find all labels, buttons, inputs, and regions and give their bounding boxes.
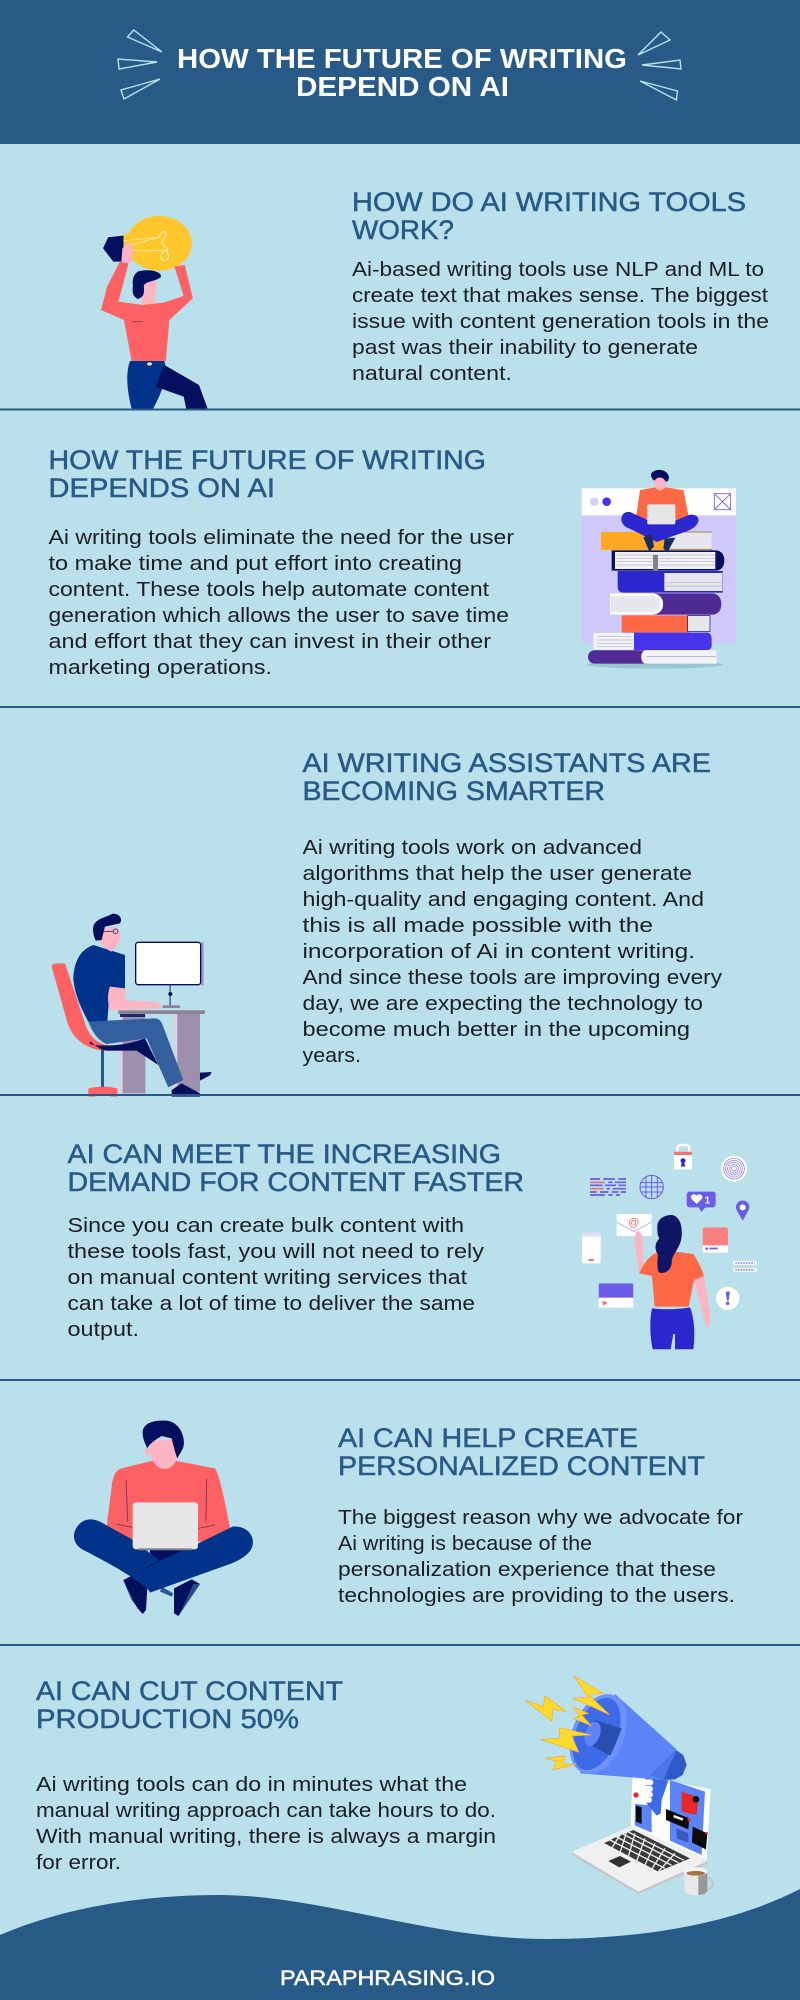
header banner <box>0 0 800 144</box>
body text <box>338 1506 743 1607</box>
panel: AI can meet the increasing demand <box>68 1139 757 1349</box>
body text: marketing operations. <box>48 656 272 679</box>
body text: content. These tools help automate content <box>48 578 489 601</box>
heading <box>48 445 486 503</box>
footer brand text: PARAPHRASING.IO <box>280 1967 495 1990</box>
heading <box>338 1423 705 1481</box>
body text: these tools fast, you will not need to rely <box>68 1240 485 1263</box>
illustration: woman with floating app icons: 1 <box>705 1195 711 1206</box>
body text: personalization experience that these <box>338 1558 716 1581</box>
heading: AI WRITING ASSISTANTS ARE <box>302 748 711 778</box>
illustration: person holding light bulb <box>101 216 208 409</box>
body text: incorporation of Ai in content writing. <box>302 940 695 963</box>
illustration: person reading on stack of books <box>582 470 736 669</box>
heading <box>36 1676 343 1734</box>
heading: HOW DO AI WRITING TOOLS <box>352 187 746 217</box>
body text: Since you can create bulk content with <box>68 1214 464 1237</box>
icon: right rays <box>638 32 681 100</box>
body text: on manual content writing services that <box>68 1266 467 1289</box>
body text: With manual writing, there is always a margin <box>36 1825 496 1848</box>
heading: AI CAN MEET THE INCREASING <box>68 1139 501 1169</box>
body text: to make time and put effort into creating <box>48 552 462 575</box>
body text: and effort that they can invest in their other <box>48 630 491 653</box>
body text: natural content. <box>352 362 512 385</box>
body text <box>352 258 769 385</box>
heading: HOW THE FUTURE OF WRITING <box>48 445 486 475</box>
body text <box>68 1214 485 1341</box>
panel: how do AI writing tools work <box>101 187 769 409</box>
body text: issue with content generation tools in the <box>352 310 769 333</box>
panel: AI can help create personalized content <box>74 1421 743 1616</box>
panel: AI can cut content production 50% <box>36 1676 713 1895</box>
heading: AI CAN HELP CREATE <box>338 1423 638 1453</box>
illustration: woman with floating app icons <box>582 1145 757 1349</box>
title <box>177 43 627 102</box>
body text: Ai-based writing tools use NLP and ML to <box>352 258 764 281</box>
heading <box>68 1139 524 1197</box>
body text <box>302 836 723 1067</box>
heading: AI CAN CUT CONTENT <box>36 1676 343 1706</box>
body text: for error. <box>36 1851 121 1874</box>
title: DEPEND ON AI <box>296 71 509 102</box>
heading <box>302 748 711 806</box>
illustration: woman with floating app icons: @ <box>628 1217 639 1229</box>
body text: high-quality and engaging content. And <box>302 888 704 911</box>
body text: become much better in the upcoming <box>302 1018 690 1041</box>
body text: create text that makes sense. The biggest <box>352 284 768 307</box>
heading <box>352 187 746 245</box>
body text: Ai writing tools work on advanced <box>302 836 642 859</box>
panel: AI writing assistants are becoming smarter <box>52 748 723 1097</box>
illustration: megaphone and laptop <box>525 1676 713 1895</box>
body text: this is all made possible with the <box>302 914 653 937</box>
body text: manual writing approach can take hours to do. <box>36 1799 496 1822</box>
heading: PERSONALIZED CONTENT <box>338 1451 705 1481</box>
body text: technologies are providing to the users. <box>338 1584 735 1607</box>
heading: DEMAND FOR CONTENT FASTER <box>68 1167 524 1197</box>
body text: The biggest reason why we advocate for <box>338 1506 743 1529</box>
body text: generation which allows the user to save time <box>48 604 509 627</box>
body text <box>48 526 514 679</box>
body text: Ai writing is because of the <box>338 1532 592 1555</box>
title: HOW THE FUTURE OF WRITING <box>177 43 627 74</box>
body text: Ai writing tools can do in minutes what the <box>36 1773 467 1796</box>
body text: Ai writing tools eliminate the need for the user <box>48 526 514 549</box>
body text: day, we are expecting the technology to <box>302 992 703 1015</box>
body text: algorithms that help the user generate <box>302 862 692 885</box>
heading: DEPENDS ON AI <box>48 473 275 503</box>
body text: years. <box>302 1044 361 1067</box>
body text: And since these tools are improving every <box>302 966 723 989</box>
heading: WORK? <box>352 215 454 245</box>
body text: past was their inability to generate <box>352 336 698 359</box>
heading: BECOMING SMARTER <box>302 776 605 806</box>
illustration: person sitting cross-legged with laptop <box>74 1421 253 1616</box>
icon: left rays <box>118 30 162 99</box>
body text <box>36 1773 496 1874</box>
panel: how the future of writing depends on AI <box>48 445 736 679</box>
illustration: man at desk with monitor <box>52 914 212 1097</box>
heading: PRODUCTION 50% <box>36 1704 299 1734</box>
body text: can take a lot of time to deliver the same <box>68 1292 475 1315</box>
footer wave <box>0 1889 800 2000</box>
body text: output. <box>68 1318 139 1341</box>
